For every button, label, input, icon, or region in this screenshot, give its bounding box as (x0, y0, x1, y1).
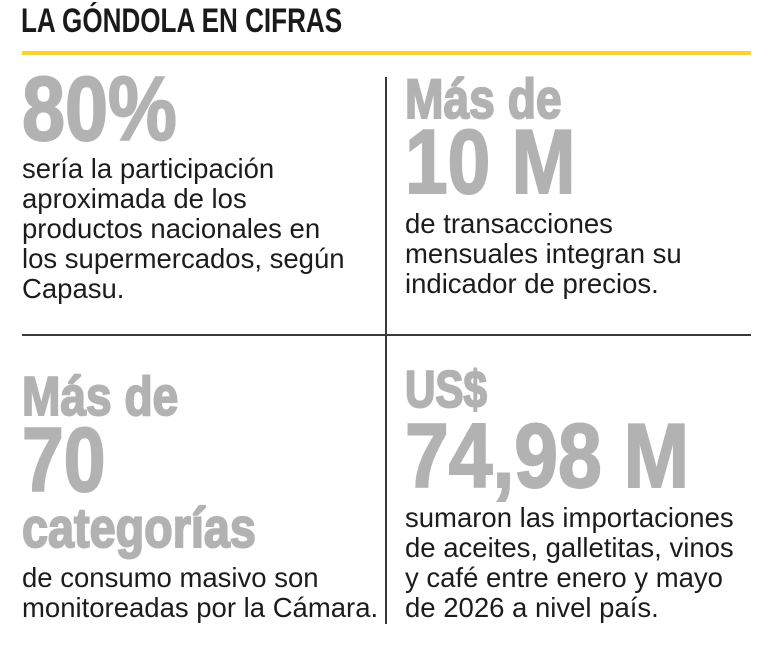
description 80% (22, 152, 345, 304)
description 74,98 M: sumaron las importaciones (405, 502, 734, 532)
big figure 10 M: 10 M (405, 112, 576, 213)
description 70: de consumo masivo son (22, 562, 319, 592)
description 10 M: indicador de precios. (405, 268, 659, 298)
description 74,98 M: de 2026 a nivel país. (405, 592, 659, 622)
description 70 (22, 562, 378, 623)
panel: 10 M (405, 67, 682, 299)
label categorías: categorías (22, 496, 256, 559)
panel: US$ 74,98 M (405, 361, 734, 623)
description 74,98 M (405, 502, 734, 623)
label US$: US$ (405, 361, 487, 419)
label Más de: Más de (22, 364, 178, 426)
big figure 70: 70 (22, 410, 106, 511)
description 80%: productos nacionales en (22, 212, 320, 244)
horizontal divider (22, 334, 751, 336)
description 10 M: de transacciones (405, 208, 613, 238)
description 80%: aproximada de los (22, 182, 247, 214)
vertical divider (385, 77, 387, 624)
description 10 M: mensuales integran su (405, 238, 682, 268)
big figure 80%: 80% (22, 58, 177, 160)
label Más de: Más de (405, 67, 562, 130)
description 70: monitoreadas por la Cámara. (22, 592, 378, 622)
description 80%: Capasu. (22, 272, 124, 304)
yellow rule (22, 51, 751, 55)
panel: 80% (22, 58, 345, 304)
description 80%: los supermercados, según (22, 242, 345, 274)
big figure 74,98 M: 74,98 M (405, 406, 689, 507)
description 74,98 M: y café entre enero y mayo (405, 562, 723, 592)
panel: 70 categorías (22, 364, 378, 623)
description 10 M (405, 208, 682, 299)
title: LA GÓNDOLA EN CIFRAS (21, 2, 342, 40)
description 74,98 M: de aceites, galletitas, vinos (405, 532, 734, 562)
description 80%: sería la participación (22, 152, 274, 184)
